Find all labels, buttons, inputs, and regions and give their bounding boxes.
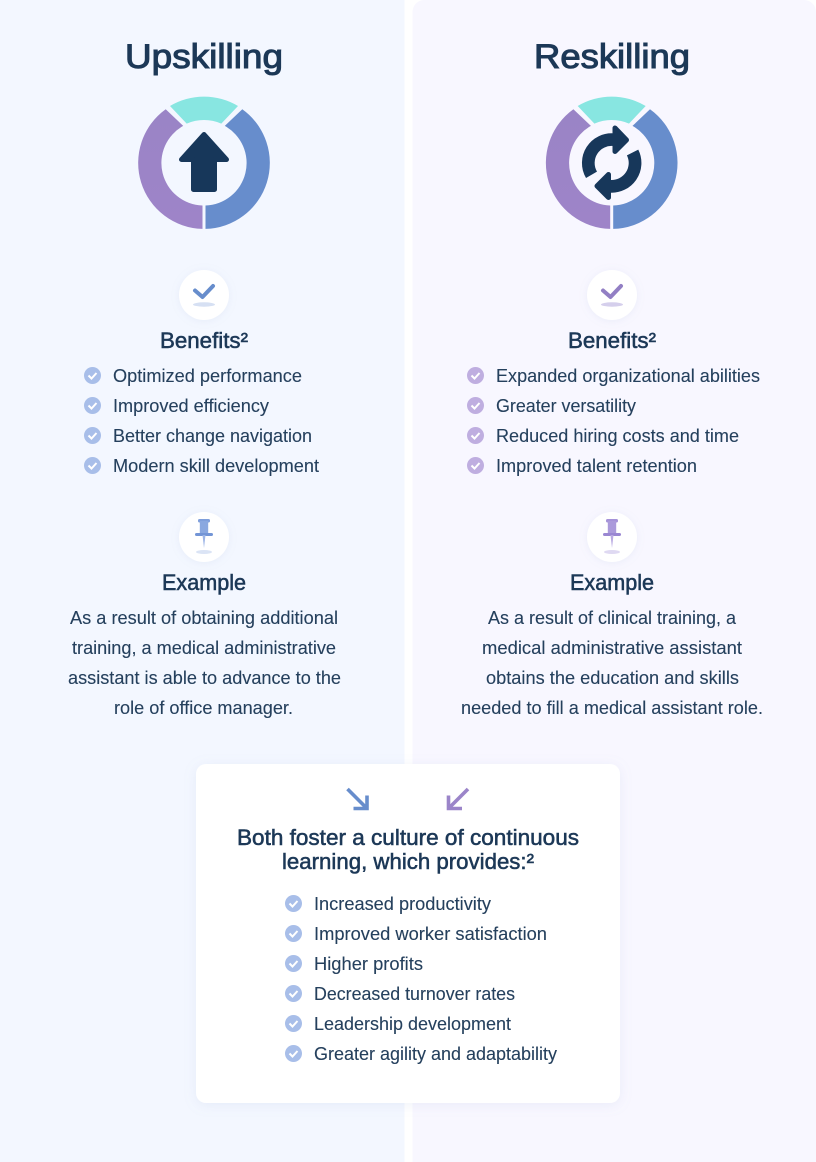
bullet item: Increased productivity: Increased productivity — [314, 894, 491, 914]
title: Upskilling: Upskilling — [125, 38, 283, 76]
text: reskilling example — [461, 608, 763, 718]
text: upskilling example: As a result of obtaining additional — [70, 608, 338, 628]
text: upskilling example — [68, 608, 341, 718]
bullet item: Decreased turnover rates: Decreased turnover rates — [314, 984, 515, 1004]
list: reskilling benefits — [467, 366, 760, 476]
text: reskilling example: needed to fill a medical assistant role. — [461, 698, 763, 718]
bullet item: Leadership development: Leadership development — [314, 1014, 511, 1034]
bullet item: Optimized performance: Optimized performance — [113, 366, 302, 386]
title: Reskilling: Reskilling — [534, 38, 690, 76]
arrow: purple pointing down-left — [448, 789, 468, 808]
heading: card title: learning, which provides:² — [282, 849, 534, 874]
icon: reskilling donut with refresh arrows — [546, 97, 678, 229]
icon: benefits check, purple — [587, 270, 637, 320]
text: reskilling example: As a result of clinical training, a — [488, 608, 737, 628]
heading: Example left: Example — [162, 570, 246, 595]
arrow: blue pointing down-right — [348, 789, 367, 808]
text: upskilling example: role of office manager. — [114, 698, 293, 718]
heading: card title — [237, 825, 579, 874]
icon: pushpin, blue — [179, 512, 229, 562]
list: shared benefits — [285, 894, 557, 1064]
icon: pushpin, purple — [587, 512, 637, 562]
icon: upskilling donut with up arrow — [138, 97, 270, 229]
text: upskilling example: assistant is able to advance to the — [68, 668, 341, 688]
panel: upskilling background — [0, 0, 404, 1162]
panel: reskilling background — [412, 0, 816, 1162]
bullet item: Greater agility and adaptability: Greater agility and adaptability — [314, 1044, 557, 1064]
panel: shared benefits card — [196, 764, 620, 1103]
bullet item: Better change navigation: Better change navigation — [113, 426, 312, 446]
bullet item: Greater versatility: Greater versatility — [496, 396, 636, 416]
heading: card title: Both foster a culture of continuous — [237, 825, 579, 850]
bullet item: Improved efficiency: Improved efficiency — [113, 396, 269, 416]
bullet item: Expanded organizational abilities: Expanded organizational abilities — [496, 366, 760, 386]
bullet item: Reduced hiring costs and time: Reduced hiring costs and time — [496, 426, 739, 446]
icon: benefits check, blue — [179, 270, 229, 320]
heading: Example right: Example — [570, 570, 654, 595]
text: upskilling example: training, a medical administrative — [72, 638, 336, 658]
text: reskilling example: obtains the education and skills — [486, 668, 739, 688]
heading: Benefits left: Benefits² — [160, 328, 248, 353]
heading: Benefits right: Benefits² — [568, 328, 656, 353]
text: reskilling example: medical administrative assistant — [482, 638, 742, 658]
bullet item: Improved worker satisfaction: Improved worker satisfaction — [314, 924, 547, 944]
bullet item: Higher profits: Higher profits — [314, 954, 423, 974]
bullet item: Improved talent retention: Improved talent retention — [496, 456, 697, 476]
bullet item: Modern skill development: Modern skill development — [113, 456, 319, 476]
list: upskilling benefits — [84, 366, 319, 476]
